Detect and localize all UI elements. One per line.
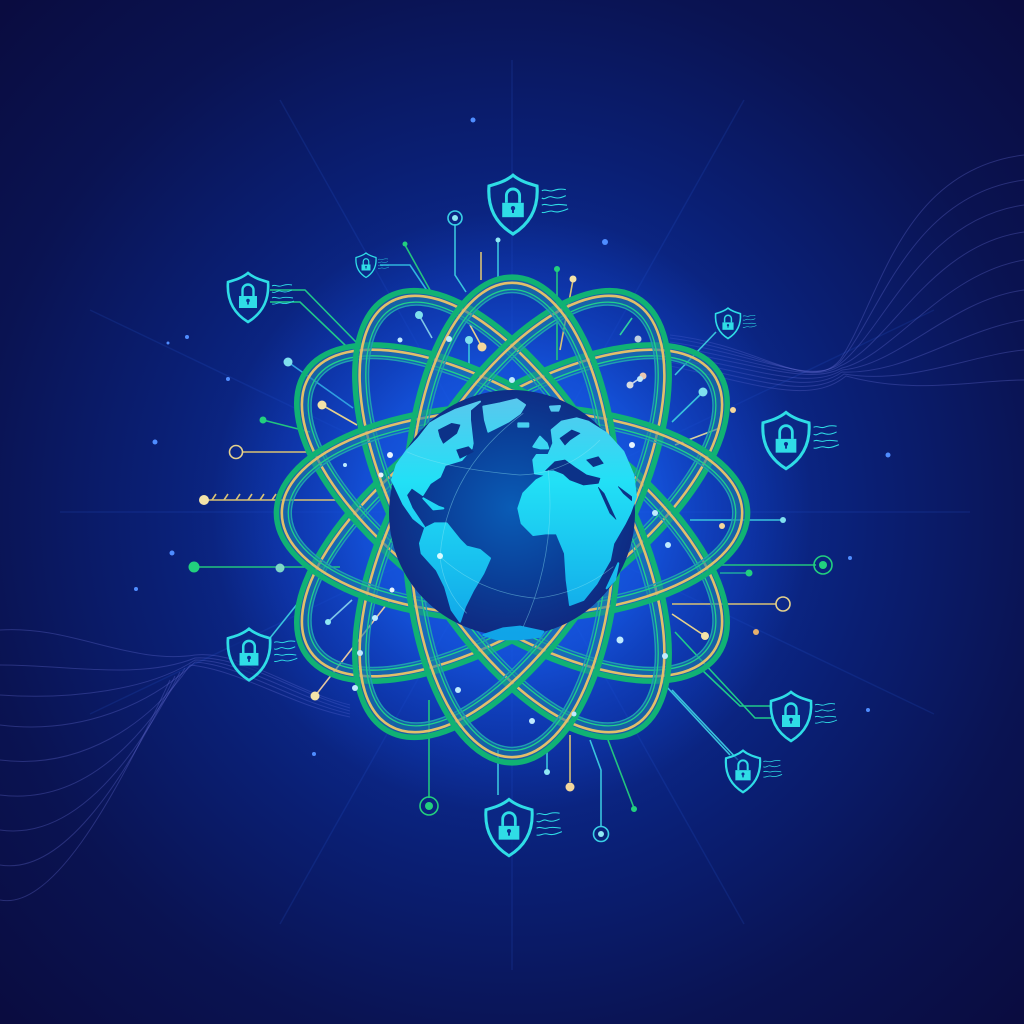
shield: lower right small <box>726 751 782 792</box>
orbit: tilt up shallow <box>244 281 780 745</box>
wave lines: bottom left <box>0 630 350 901</box>
connector: left green <box>188 562 340 572</box>
globe light point <box>437 553 443 559</box>
connector: bottom nodes <box>420 700 637 842</box>
wave lines: top right <box>670 155 1024 391</box>
shield: lower left <box>228 629 297 680</box>
inland seas <box>438 423 632 519</box>
orbit: horizontal <box>276 405 748 621</box>
globe <box>389 390 636 639</box>
connector: right nodes <box>672 517 832 640</box>
shield: lower right <box>771 692 837 741</box>
connector lines and nodes <box>188 211 832 842</box>
connector: left dashed gold <box>199 494 340 505</box>
connector: top cyan node <box>448 211 466 292</box>
orbit: vertical <box>404 277 620 763</box>
orbit: steep right <box>292 242 732 786</box>
shield: top <box>489 175 568 234</box>
connector: lower right shields <box>665 632 772 760</box>
continents <box>392 399 636 639</box>
connector: inner upper-right dots <box>620 318 720 445</box>
scattered background particles <box>134 118 890 756</box>
connector: inner upper-left dots <box>284 311 486 425</box>
connector: left gold node <box>230 446 308 458</box>
shield: bottom <box>486 799 562 856</box>
shield: small upper right <box>715 308 757 338</box>
inner sparks <box>343 336 736 724</box>
shield: small upper left <box>356 253 389 278</box>
central glow <box>212 212 812 812</box>
connector: small shield <box>380 265 430 295</box>
orbit: steep left <box>292 242 732 786</box>
land masses <box>392 399 636 639</box>
orbit rings <box>244 242 780 786</box>
connector: top-left shield <box>270 290 356 346</box>
shield: upper left <box>228 273 294 322</box>
orbit: tilt down shallow <box>244 281 780 745</box>
connector: top short lines <box>402 238 576 360</box>
graticule lines <box>407 413 613 627</box>
connector: upper left green <box>260 416 310 432</box>
connector: lower left <box>270 600 390 700</box>
connector: right upper shield <box>675 332 716 375</box>
shield: right <box>763 412 839 469</box>
